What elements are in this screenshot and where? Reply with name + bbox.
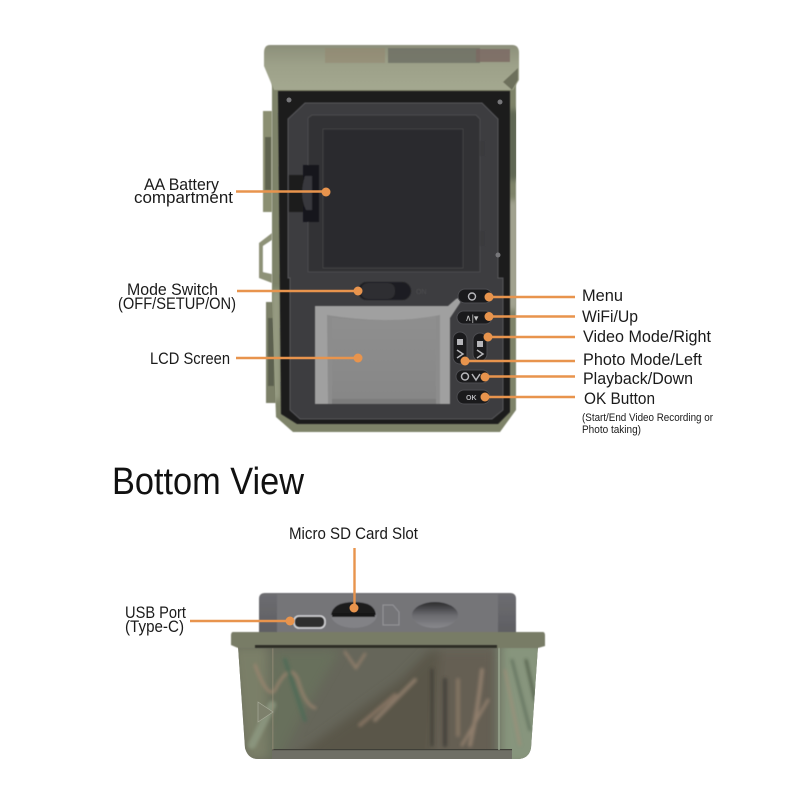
callout: AA battery compartment: compartment [134, 188, 233, 207]
camo pattern [238, 648, 538, 759]
camo streaks [252, 652, 535, 745]
callout: menu: Menu [582, 286, 623, 305]
callout: wifi up: WiFi/Up [582, 307, 638, 326]
callout: AA battery compartment [134, 175, 330, 207]
button: menu [458, 289, 492, 303]
control buttons [453, 289, 492, 404]
callout: micro SD card slot: Micro SD Card Slot [289, 524, 418, 543]
OK button note: (Start/End Video Recording or [582, 412, 713, 424]
button: playback down [456, 370, 489, 383]
side latches [259, 111, 276, 403]
callout: USB port: (Type-C) [125, 617, 184, 636]
camo body shell [272, 70, 516, 432]
mode switch [358, 282, 426, 300]
battery compartment cover [289, 115, 485, 272]
button: wifi up: ∧|▾ [465, 313, 479, 323]
shell tonal patches [272, 110, 519, 400]
callout: USB port [125, 603, 294, 636]
callout: playback down [480, 369, 693, 388]
top flap [264, 45, 519, 90]
callout: mode switch [118, 280, 362, 313]
callout: photo mode left: Photo Mode/Left [583, 350, 702, 369]
mode switch: ON [416, 289, 426, 296]
button: ok: OK [466, 395, 476, 402]
camera back view [259, 45, 519, 432]
callout: mode switch: (OFF/SETUP/ON) [118, 294, 236, 313]
callout: video mode right [484, 327, 711, 346]
callout: USB port: USB Port [125, 603, 186, 622]
OK button note [582, 412, 713, 436]
callout: OK button [480, 389, 655, 408]
button: video right [473, 333, 487, 361]
callout: menu [484, 286, 623, 305]
callout: video mode right: Video Mode/Right [583, 327, 711, 346]
callout: wifi up [484, 307, 638, 326]
callout: LCD screen [150, 349, 362, 368]
callout: AA battery compartment: AA Battery [144, 175, 219, 194]
callout: LCD screen: LCD Screen [150, 349, 230, 368]
callout: playback down: Playback/Down [583, 369, 693, 388]
grey top block [259, 593, 516, 634]
callout: mode switch: Mode Switch [127, 280, 218, 299]
callout: OK button: OK Button [584, 389, 655, 408]
camera bottom view [231, 593, 545, 765]
LCD screen [315, 298, 460, 404]
callout: photo mode left [460, 350, 702, 369]
callout: micro SD card slot [289, 524, 418, 612]
heading: bottom view: Bottom View [112, 461, 304, 503]
black back panel [278, 91, 510, 424]
camo lip and body [231, 632, 545, 765]
screws [286, 98, 502, 258]
grey inner plate [288, 103, 503, 419]
OK button note: Photo taking) [582, 424, 641, 436]
button: photo left [453, 332, 467, 364]
